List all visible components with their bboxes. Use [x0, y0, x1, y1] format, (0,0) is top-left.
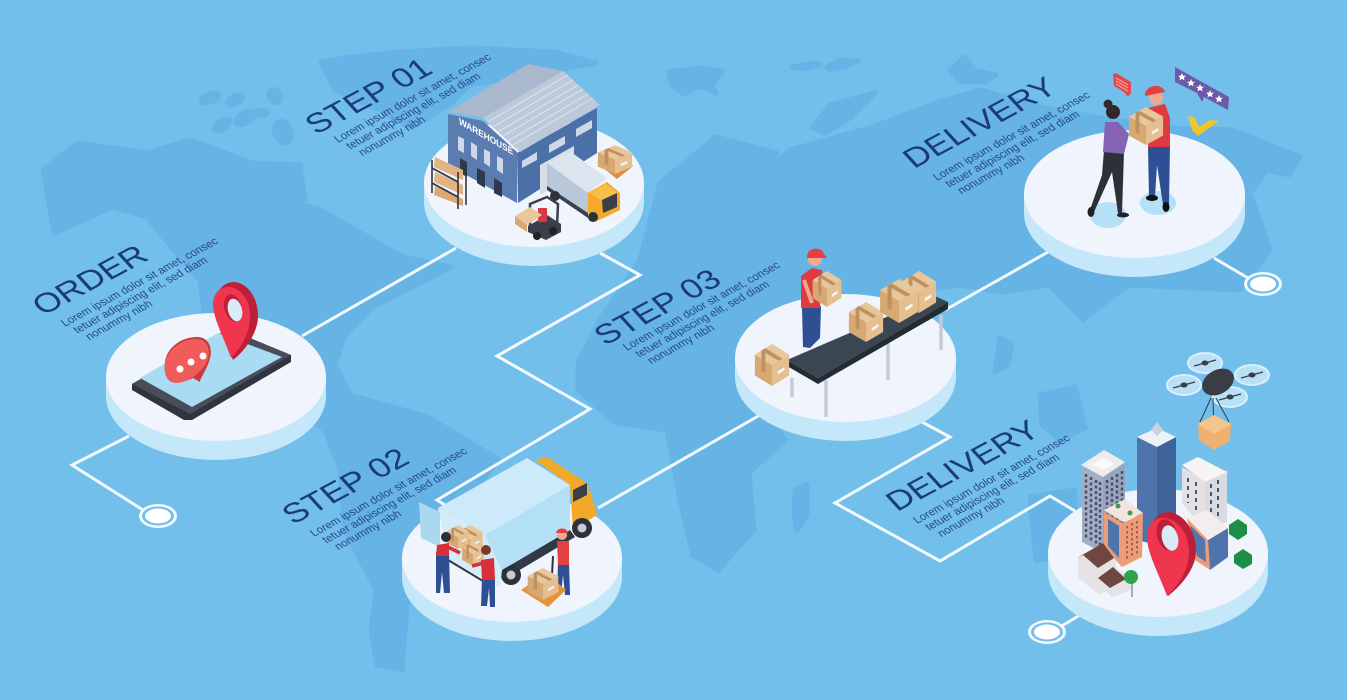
- text: delivery top: tetuer adipiscing elit, sed diam: [943, 109, 1082, 190]
- icon: check mark: [1188, 116, 1219, 136]
- icon: worker left: [436, 532, 460, 593]
- text: step 02: nonummy nibh: [332, 508, 404, 553]
- panel: order: [106, 282, 326, 460]
- icon: pallet: [597, 145, 633, 179]
- icon: smartphone: [132, 329, 291, 420]
- heading: step 02: STEP 02: [274, 442, 416, 530]
- icon: tower: [1137, 422, 1176, 545]
- panel: step 02 loading: [402, 457, 622, 641]
- icon: worker with pallet jack: [552, 528, 570, 595]
- icon: boxes: [755, 271, 936, 386]
- icon: worker: [801, 249, 827, 348]
- text: step 01: Lorem ipsum dolor sit amet, consec: [332, 52, 494, 145]
- disc: [106, 313, 326, 460]
- icon: map pin: [1147, 512, 1196, 596]
- panel: step 03 conveyor: [735, 249, 956, 441]
- icon: grey building: [1081, 450, 1125, 553]
- text: delivery bottom: tetuer adipiscing elit, sed diam: [923, 452, 1062, 533]
- text: order: nonummy nibh: [83, 298, 155, 343]
- text: order: Lorem ipsum dolor sit amet, consec: [59, 236, 221, 329]
- icon: white building: [1182, 457, 1227, 530]
- text: step 02: tetuer adipiscing elit, sed diam: [320, 465, 459, 546]
- node: delivery bottom: [1028, 620, 1066, 644]
- icon: woman: [1088, 100, 1129, 218]
- heading: step 01: STEP 01: [297, 52, 439, 140]
- icon: orange building: [1104, 499, 1143, 567]
- icon: warehouse: [448, 64, 600, 203]
- heading: order: ORDER: [24, 239, 155, 321]
- heading: step 03: STEP 03: [586, 263, 728, 351]
- icon: forklift: [515, 197, 561, 240]
- heading: delivery bottom: DELIVERY: [878, 414, 1047, 517]
- text: step 03: Lorem ipsum dolor sit amet, consec: [621, 260, 783, 353]
- label: WAREHOUSE: WAREHOUSE: [459, 116, 513, 158]
- text: step 03: tetuer adipiscing elit, sed diam: [633, 279, 772, 360]
- icon: hedges: [1229, 519, 1252, 569]
- map bay: [304, 153, 373, 213]
- disc: [735, 294, 956, 441]
- text: step 01: nonummy nibh: [356, 114, 428, 159]
- panel: delivery city: [1048, 353, 1269, 636]
- disc: [402, 494, 622, 641]
- panel: step 01 warehouse: [424, 64, 644, 266]
- text: delivery bottom: nonummy nibh: [935, 495, 1007, 540]
- disc: [1048, 489, 1268, 636]
- text: step 02: Lorem ipsum dolor sit amet, consec: [308, 446, 470, 539]
- icon: pallet with box: [521, 568, 566, 607]
- icon: conveyor legs: [792, 315, 941, 417]
- node: delivery top: [1244, 272, 1282, 296]
- icon: delivery truck: [547, 152, 620, 222]
- icon: houses: [1077, 543, 1131, 597]
- shadows: [1090, 191, 1176, 228]
- panel: delivery handover: [1024, 67, 1245, 277]
- heading: delivery top: DELIVERY: [895, 71, 1064, 174]
- icon: speech bubble: [1113, 73, 1131, 97]
- text: step 03: nonummy nibh: [645, 322, 717, 367]
- text: delivery top: nonummy nibh: [955, 152, 1027, 197]
- icon: worker right: [472, 545, 495, 607]
- connector lines: [72, 248, 1248, 627]
- icon: shelf rack: [432, 157, 466, 209]
- node: order: [139, 504, 177, 528]
- text: order: tetuer adipiscing elit, sed diam: [71, 255, 210, 336]
- icon: courier: [1145, 86, 1170, 212]
- icon: chat bubble: [165, 337, 211, 383]
- text: step 01: tetuer adipiscing elit, sed diam: [344, 71, 483, 152]
- disc: [424, 119, 644, 266]
- text: delivery bottom: Lorem ipsum dolor sit amet, consec: [911, 433, 1073, 526]
- icon: rating stars: [1175, 67, 1229, 110]
- disc: [1024, 130, 1245, 277]
- icon: open truck: [419, 457, 597, 587]
- icon: conveyor belt: [787, 296, 948, 384]
- icon: map pin: [213, 282, 258, 360]
- text: delivery top: Lorem ipsum dolor sit amet, consec: [931, 90, 1093, 183]
- icon: glass building: [1187, 510, 1228, 570]
- icon: tree: [1124, 570, 1138, 597]
- icon: drone: [1167, 353, 1269, 450]
- icon: box: [1129, 107, 1163, 145]
